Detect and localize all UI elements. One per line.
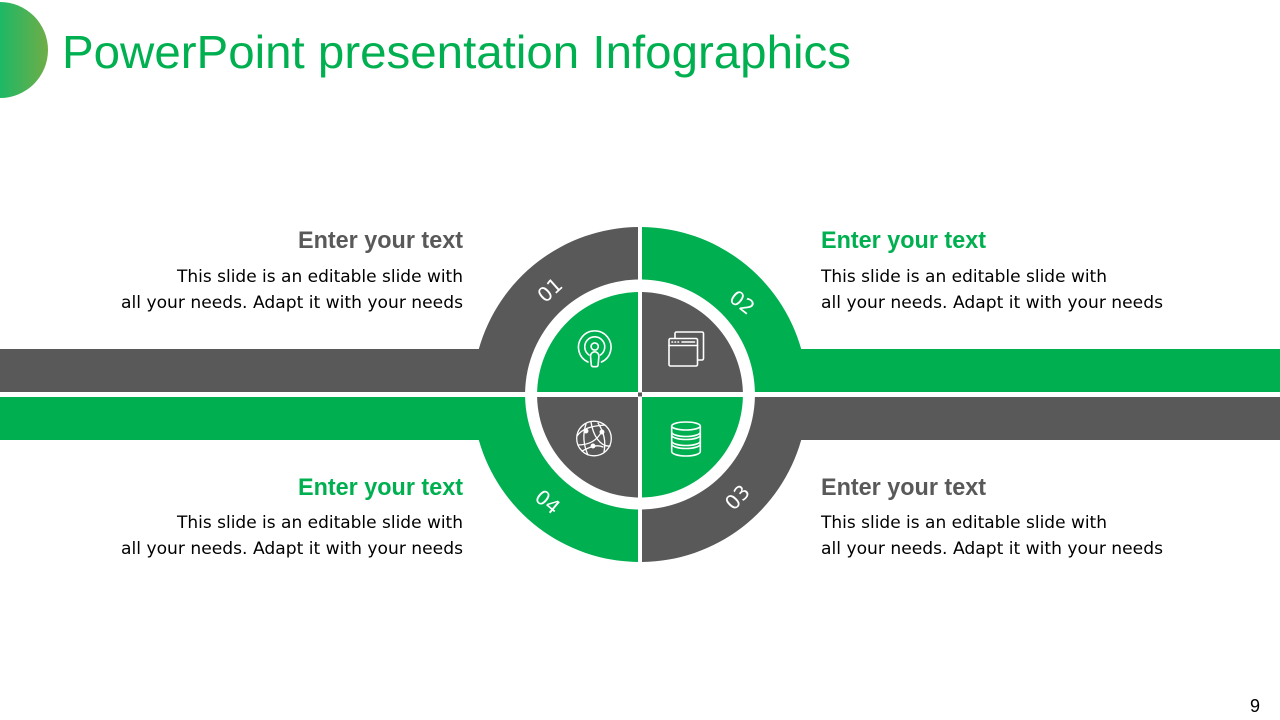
number 04: 04 [530, 485, 565, 519]
heading 03: Enter your text [821, 474, 986, 501]
centre dot [638, 392, 642, 396]
segment 01: grey arc and left bar [0, 227, 638, 392]
segment 04: green arc and left bar [0, 397, 638, 562]
text block 01 [121, 227, 463, 312]
text block 03 [820, 474, 1163, 558]
icon: database [672, 422, 700, 456]
heading 01: Enter your text [298, 227, 463, 254]
number 01: 01 [532, 272, 567, 307]
body 01: This slide is an editable slide with [176, 267, 463, 286]
number 02: 02 [725, 285, 760, 320]
body 02: This slide is an editable slide with [820, 267, 1107, 286]
body 04: This slide is an editable slide with [176, 513, 463, 532]
icon: podcast [578, 331, 611, 367]
segment 02: green arc and right bar [642, 227, 1280, 392]
body 03: This slide is an editable slide with [820, 513, 1107, 532]
segment 03: grey arc and right bar [642, 397, 1280, 562]
text block 04 [121, 474, 463, 558]
text block 02: all your needs. Adapt it with your needs [821, 293, 1163, 312]
inner pie quadrant bottom left [537, 397, 638, 498]
inner pie quadrant bottom right [642, 397, 743, 498]
heading 04: Enter your text [298, 474, 463, 501]
icon: browser windows [669, 332, 704, 366]
text block 01: all your needs. Adapt it with your needs [121, 293, 463, 312]
text block 04: all your needs. Adapt it with your needs [121, 539, 463, 558]
inner pie quadrant top left [537, 292, 638, 392]
page number: 9 [1250, 696, 1260, 716]
decorative title circle [0, 2, 48, 98]
title: PowerPoint presentation Infographics [62, 26, 851, 78]
text block 02 [820, 227, 1163, 312]
number 03: 03 [720, 480, 755, 515]
icon: globe network [577, 421, 611, 456]
text block 03: all your needs. Adapt it with your needs [821, 539, 1163, 558]
inner pie quadrant top right [642, 292, 743, 392]
heading 02: Enter your text [821, 227, 986, 254]
